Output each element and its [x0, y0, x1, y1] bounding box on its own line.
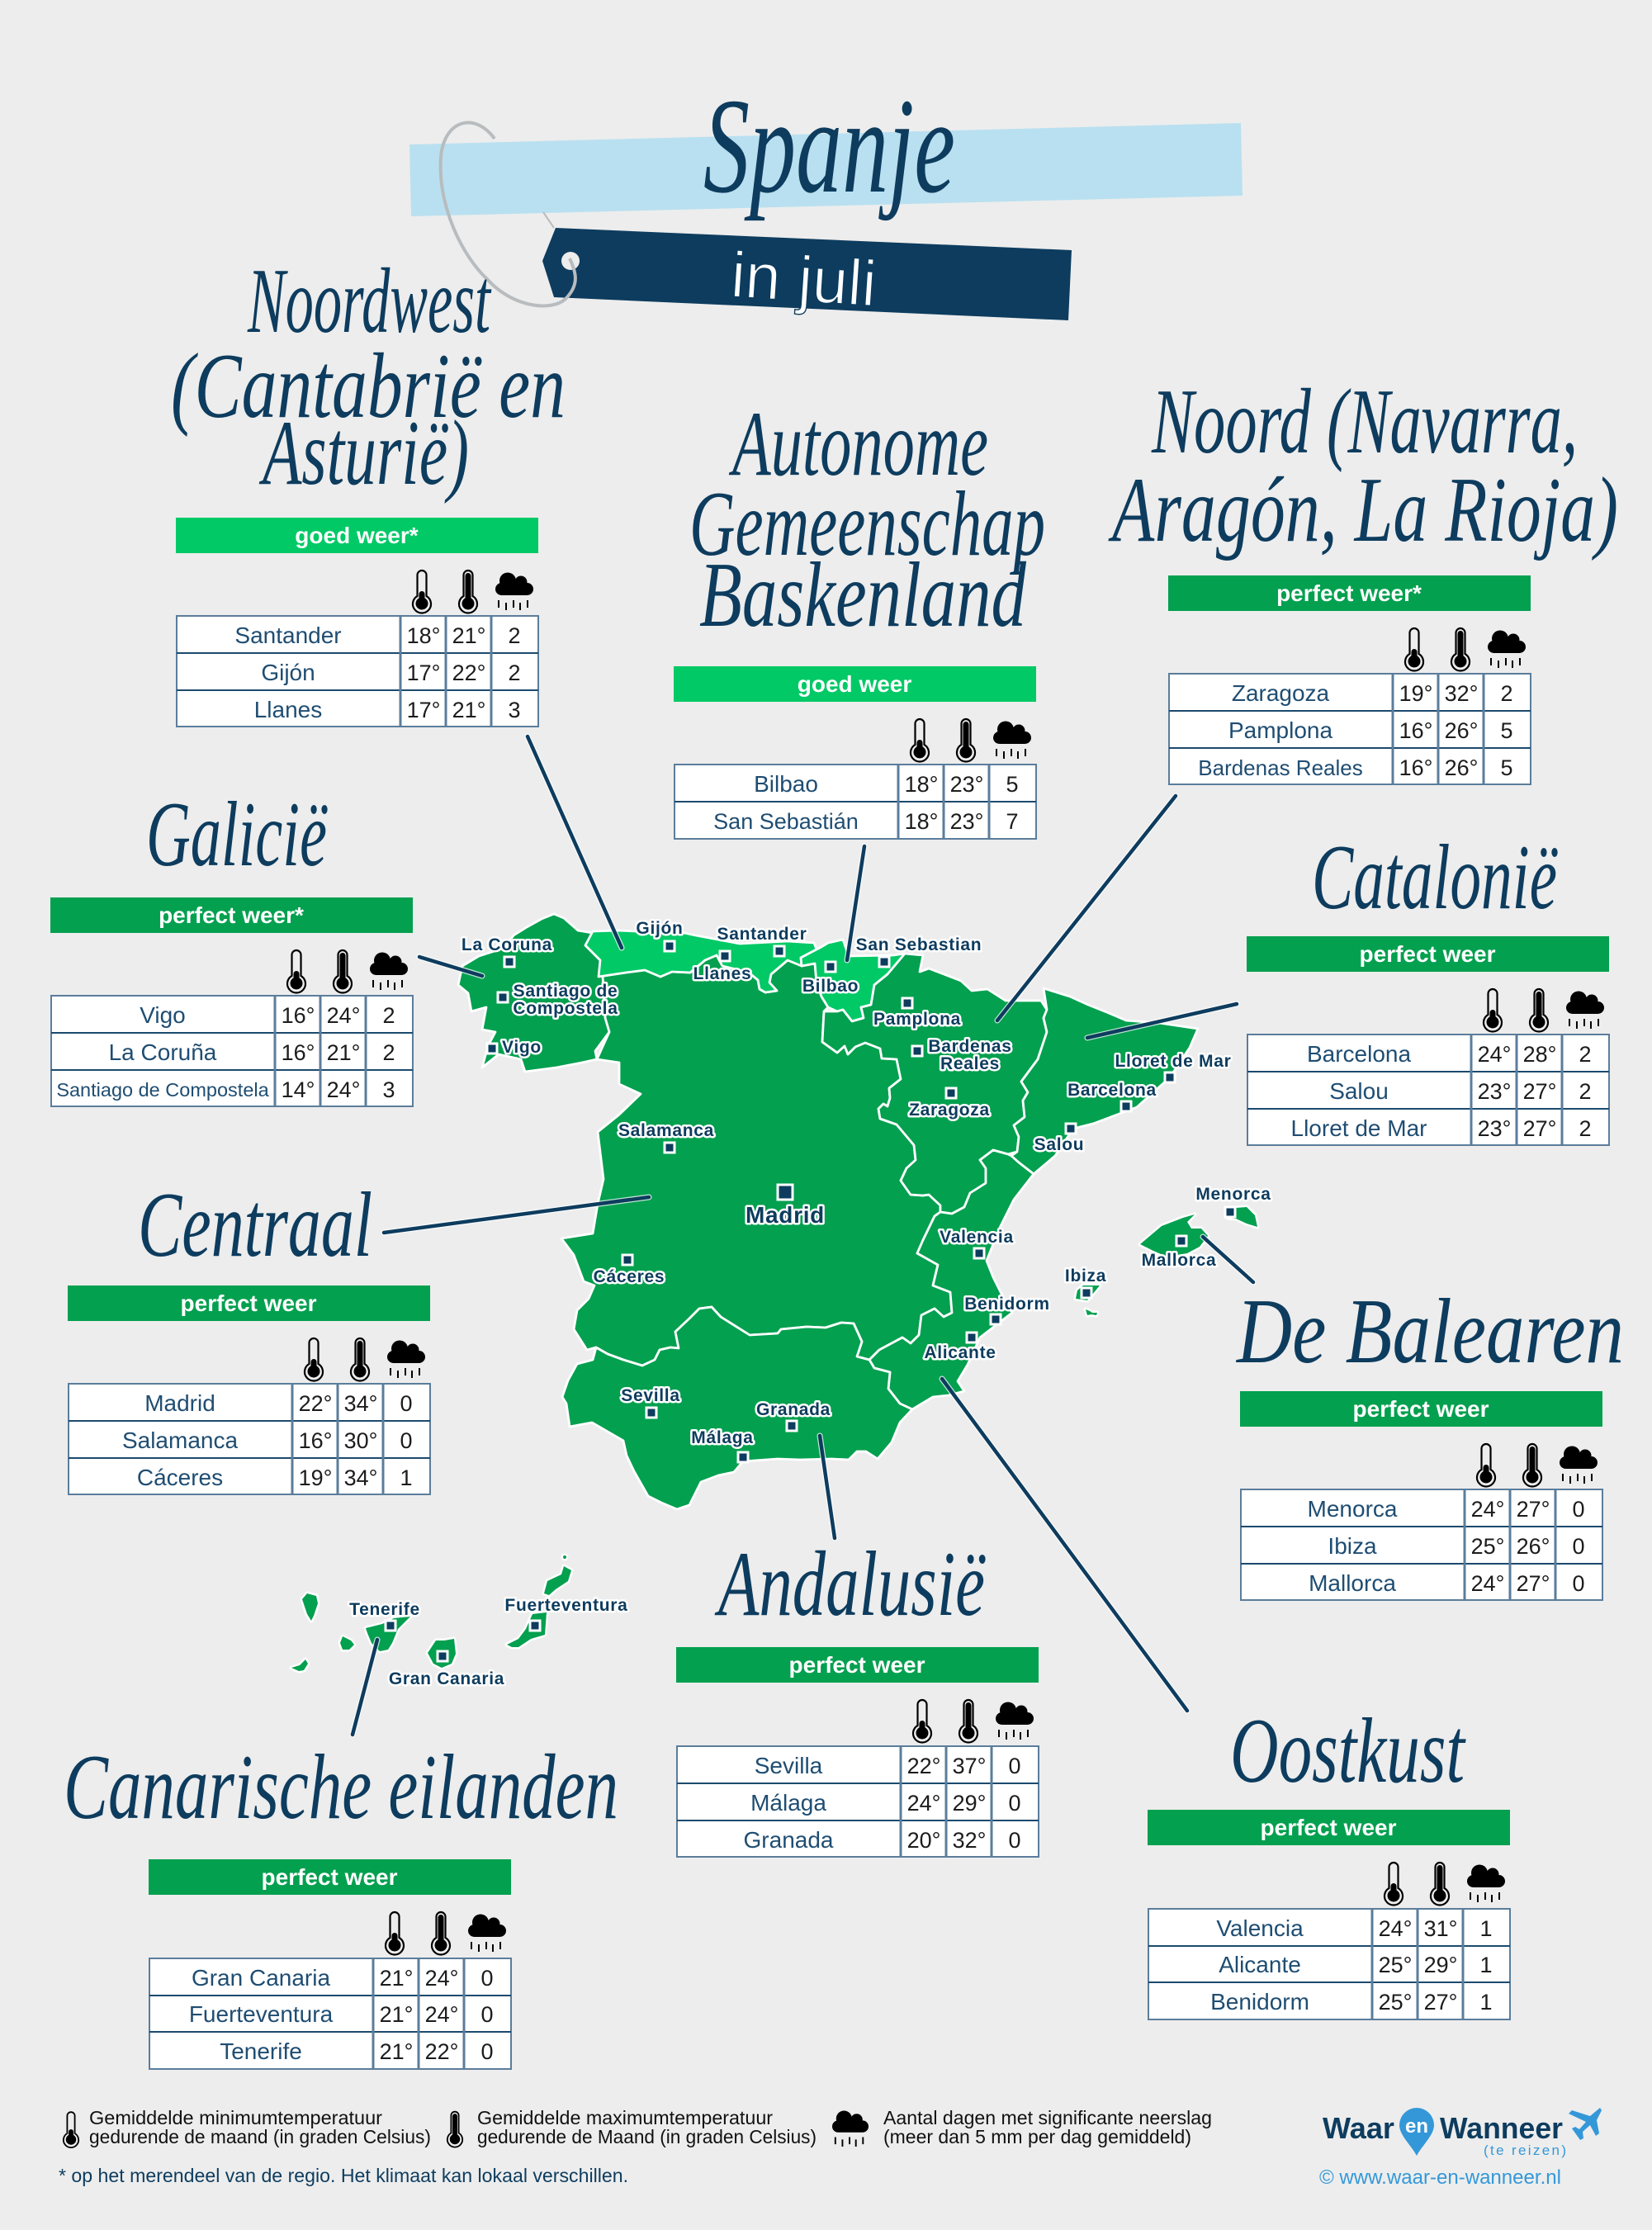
- panel: Baskenland: 23°: [950, 772, 983, 797]
- panel: Catalonië: perfect weer: [1360, 941, 1496, 967]
- logo: [1319, 2108, 1602, 2189]
- legend text: maximum temperature: Gemiddelde maximumtemperatuur: [477, 2107, 773, 2128]
- islands: Balearen: [1076, 1207, 1257, 1315]
- legend text: precipitation: Aantal dagen met significante neerslag: [883, 2107, 1212, 2128]
- panel: De Balearen: Ibiza: [1328, 1533, 1377, 1559]
- panel: Noordwest: goed weer*: [295, 523, 419, 548]
- heading: Oostkust: Oostkust: [1230, 1700, 1466, 1802]
- legend text: minimum temperature: [89, 2107, 431, 2147]
- panel: Oostkust: 25°: [1379, 1953, 1412, 1977]
- city labels: Lloret de Mar: [1115, 1052, 1231, 1071]
- panel: Catalonië: [1247, 936, 1609, 1145]
- title banner: [409, 123, 1243, 216]
- icon: precipitation: [832, 2110, 869, 2147]
- panel: Oostkust: Alicante: [1219, 1952, 1301, 1977]
- panel: De Balearen: 26°: [1517, 1534, 1550, 1559]
- panel: Canarische eilanden: 24°: [425, 1966, 458, 1991]
- title: Spanje: Spanje: [703, 70, 955, 221]
- panel: Andalusië: 22°: [907, 1754, 940, 1778]
- panel: Andalusië: perfect weer: [789, 1652, 925, 1678]
- panel: Galicië: 2: [382, 1040, 395, 1065]
- panel: Centraal: perfect weer: [181, 1290, 317, 1316]
- panel: Catalonië: 23°: [1478, 1116, 1511, 1141]
- city labels: Cáceres: [594, 1267, 665, 1286]
- panel: Galicië: 16°: [282, 1003, 315, 1028]
- legend text: precipitation: [883, 2107, 1212, 2147]
- city labels: Vigo: [502, 1038, 542, 1057]
- panel: Oostkust: 31°: [1424, 1916, 1457, 1941]
- panel: Catalonië: 27°: [1523, 1079, 1556, 1104]
- panel: Andalusië: 0: [1008, 1791, 1021, 1816]
- panel: Noordwest: 18°: [407, 623, 440, 648]
- panel: Noordwest: 2: [508, 660, 521, 685]
- panel: Oostkust: Valencia: [1216, 1915, 1304, 1941]
- panel: Baskenland: San Sebastián: [713, 809, 859, 834]
- legend text: minimum temperature: Gemiddelde minimumtemperatuur: [89, 2107, 382, 2128]
- heading: Noordwest: Asturië): [258, 402, 469, 504]
- panel: Noordwest: 21°: [452, 698, 485, 722]
- panel: Noord: 26°: [1445, 718, 1478, 743]
- city labels: [349, 919, 1271, 1688]
- region: Oostkust: [869, 1150, 1034, 1409]
- panel: Centraal: 34°: [344, 1465, 377, 1490]
- logo: © www.waar-en-wanneer.nl: [1319, 2166, 1561, 2189]
- panel: Galicië: 16°: [282, 1040, 315, 1065]
- footnote: * op het merendeel van de regio. Het klimaat kan lokaal verschillen.: [59, 2165, 628, 2186]
- panel: Centraal: Salamanca: [122, 1427, 238, 1453]
- panel: Noord: 16°: [1399, 755, 1432, 780]
- city labels: Santiago de: [514, 982, 618, 1001]
- legend text: maximum temperature: [477, 2107, 817, 2147]
- panel: Andalusië: 24°: [907, 1791, 940, 1816]
- map of Spain: [458, 914, 1198, 1509]
- city labels: Salou: [1034, 1135, 1084, 1154]
- legend text: precipitation: (meer dan 5 mm per dag gemiddeld): [883, 2126, 1191, 2147]
- panel: Oostkust: 27°: [1424, 1990, 1457, 2015]
- panel: Noordwest: 17°: [407, 698, 440, 722]
- panel: Noordwest: Llanes: [254, 697, 322, 722]
- panel: Centraal: [68, 1285, 430, 1494]
- panel: De Balearen: perfect weer: [1353, 1396, 1489, 1422]
- heading: Baskenland: Autonome: [728, 393, 988, 495]
- panel: Baskenland: 18°: [905, 772, 938, 797]
- panel: Galicië: 24°: [327, 1003, 360, 1028]
- panel: Canarische eilanden: 0: [480, 2039, 494, 2064]
- city labels: Bilbao: [802, 977, 859, 996]
- panel: Noord: 32°: [1445, 681, 1478, 706]
- panel: Oostkust: 1: [1479, 1953, 1493, 1977]
- panel: Galicië: Vigo: [140, 1002, 186, 1028]
- panel: Andalusië: 37°: [953, 1754, 986, 1778]
- city labels: Sevilla: [621, 1386, 680, 1405]
- panel: Catalonië: 2: [1579, 1079, 1592, 1104]
- panel: Baskenland: goed weer: [798, 671, 911, 697]
- panel: Baskenland: 5: [1006, 772, 1019, 797]
- panel: Canarische eilanden: 24°: [425, 2002, 458, 2027]
- panel: De Balearen: 24°: [1471, 1497, 1504, 1522]
- panel: Oostkust: 29°: [1424, 1953, 1457, 1977]
- city labels: Madrid: [746, 1202, 825, 1228]
- panel: Noord: perfect weer*: [1276, 580, 1422, 606]
- panel: De Balearen: 0: [1572, 1497, 1585, 1522]
- city labels: Alicante: [924, 1343, 996, 1362]
- heading: Noordwest: Noordwest: [247, 250, 492, 353]
- city labels: Tenerife: [349, 1600, 420, 1619]
- panel: Baskenland: [674, 666, 1036, 839]
- city labels: Mallorca: [1142, 1251, 1216, 1270]
- panel: Canarische eilanden: Gran Canaria: [192, 1965, 330, 1991]
- panel: Canarische eilanden: 0: [480, 2002, 494, 2027]
- subtitle tag: in juli: [441, 123, 1072, 320]
- logo: Wanneer: [1440, 2111, 1563, 2145]
- panel: De Balearen: 0: [1572, 1571, 1585, 1596]
- city labels: Compostela: [513, 999, 618, 1018]
- panel: Catalonië: 23°: [1478, 1079, 1511, 1104]
- panel: Centraal: 34°: [344, 1391, 377, 1416]
- panel: Andalusië: 0: [1008, 1828, 1021, 1853]
- panel: De Balearen: 25°: [1471, 1534, 1504, 1559]
- panel: Noord: 16°: [1399, 718, 1432, 743]
- connector lines: [353, 736, 1253, 1735]
- panel: Noordwest: 22°: [452, 660, 485, 685]
- panel: Canarische eilanden: 21°: [380, 1966, 413, 1991]
- panel: Baskenland: Bilbao: [754, 771, 818, 797]
- city labels: Bardenas: [928, 1037, 1012, 1056]
- panel: Galicië: perfect weer*: [159, 902, 304, 928]
- panel: Catalonië: 24°: [1478, 1042, 1511, 1067]
- legend text: minimum temperature: gedurende de maand (in graden Celsius): [89, 2126, 431, 2147]
- panel: Noord: 2: [1500, 681, 1513, 706]
- islands: Canarische eilanden: [291, 1555, 571, 1671]
- panel: Baskenland: 7: [1006, 809, 1019, 834]
- region: Noordwest: [585, 930, 817, 992]
- city labels: Menorca: [1195, 1185, 1271, 1204]
- panel: Canarische eilanden: [149, 1859, 511, 2069]
- panel: De Balearen: [1240, 1391, 1602, 1600]
- panel: Noordwest: Gijón: [261, 660, 315, 685]
- panel: Oostkust: [1148, 1810, 1510, 2019]
- region: Galicië: [458, 914, 609, 1072]
- panel: De Balearen: 27°: [1517, 1497, 1550, 1522]
- city labels: Barcelona: [1067, 1081, 1157, 1100]
- panel: Catalonië: 27°: [1523, 1116, 1556, 1141]
- panel: Oostkust: 1: [1479, 1990, 1493, 2015]
- city labels: Valencia: [940, 1228, 1014, 1247]
- panel: Andalusië: Málaga: [750, 1790, 826, 1816]
- panel: Noordwest: Santander: [234, 623, 342, 648]
- city labels: Gijón: [636, 919, 684, 938]
- icon: minimum temperature: [64, 2112, 78, 2147]
- panel: Galicië: La Coruña: [109, 1039, 217, 1065]
- legend text: maximum temperature: gedurende de Maand (in graden Celsius): [477, 2126, 817, 2147]
- panel: Noordwest: 17°: [407, 660, 440, 685]
- city labels: Reales: [940, 1054, 1000, 1073]
- panel: Oostkust: Benidorm: [1210, 1989, 1309, 2015]
- city labels: Zaragoza: [909, 1101, 990, 1120]
- panel: Oostkust: perfect weer: [1261, 1815, 1397, 1840]
- panel: Catalonië: 2: [1579, 1116, 1592, 1141]
- logo: en: [1405, 2115, 1428, 2138]
- heading: Baskenland: Gemeenschap: [689, 473, 1045, 575]
- panel: Noord: Pamplona: [1228, 717, 1332, 743]
- panel: Noordwest: 3: [508, 698, 521, 722]
- city labels: Málaga: [691, 1428, 754, 1447]
- icon: maximum temperature: [447, 2112, 462, 2147]
- panel: De Balearen: 0: [1572, 1534, 1585, 1559]
- heading: Canarische eilanden: Canarische eilanden: [64, 1736, 618, 1839]
- city labels: Fuerteventura: [504, 1596, 628, 1615]
- panel: Noord: Bardenas Reales: [1198, 755, 1363, 780]
- region: Catalonië: [1011, 988, 1198, 1174]
- region: Centraal: [561, 955, 952, 1366]
- panel: Canarische eilanden: Tenerife: [220, 2038, 302, 2064]
- panel: Canarische eilanden: Fuerteventura: [189, 2001, 334, 2027]
- city labels: Gran Canaria: [389, 1669, 504, 1688]
- panel: Centraal: 19°: [299, 1465, 332, 1490]
- panel: Centraal: 22°: [299, 1391, 332, 1416]
- panel: Oostkust: 24°: [1379, 1916, 1412, 1941]
- heading: Centraal: Centraal: [138, 1174, 372, 1276]
- city labels: La Coruna: [462, 935, 552, 954]
- panel: Baskenland: 18°: [905, 809, 938, 834]
- panel: Noord: 19°: [1399, 681, 1432, 706]
- panel: Noord: [1168, 575, 1531, 784]
- heading: Galicië: Galicië: [146, 784, 328, 886]
- heading: Noordwest: [171, 250, 566, 504]
- panel: Noord: 26°: [1445, 755, 1478, 780]
- panel: Centraal: 0: [400, 1391, 413, 1416]
- city labels: Salamanca: [618, 1121, 714, 1140]
- panel: Andalusië: 0: [1008, 1754, 1021, 1778]
- heading: Baskenland: [689, 393, 1045, 646]
- panel: Canarische eilanden: 21°: [380, 2039, 413, 2064]
- panel: Centraal: Madrid: [144, 1390, 215, 1416]
- city labels: San Sebastian: [856, 935, 982, 954]
- panel: Centraal: 0: [400, 1428, 413, 1453]
- panel: Centraal: 1: [400, 1465, 413, 1490]
- city markers: [386, 941, 1235, 1661]
- panel: Noordwest: [176, 518, 538, 727]
- panel: Galicië: 14°: [282, 1077, 315, 1102]
- panel: Oostkust: 1: [1479, 1916, 1493, 1941]
- panel: De Balearen: Menorca: [1308, 1496, 1398, 1522]
- panel: Canarische eilanden: 0: [480, 1966, 494, 1991]
- panel: Catalonië: 2: [1579, 1042, 1592, 1067]
- panel: Andalusië: Sevilla: [755, 1753, 823, 1778]
- panel: Catalonië: Barcelona: [1307, 1041, 1411, 1067]
- panel: Centraal: 30°: [344, 1428, 377, 1453]
- panel: Andalusië: 32°: [953, 1828, 986, 1853]
- panel: Oostkust: 25°: [1379, 1990, 1412, 2015]
- legend: [64, 2107, 1212, 2147]
- panel: Noordwest: 2: [508, 623, 521, 648]
- city labels: Santander: [717, 925, 807, 944]
- panel: Galicië: 2: [382, 1003, 395, 1028]
- panel: Galicië: Santiago de Compostela: [56, 1079, 270, 1101]
- panel: Andalusië: 20°: [907, 1828, 940, 1853]
- panel: Centraal: 16°: [299, 1428, 332, 1453]
- panel: Canarische eilanden: 22°: [425, 2039, 458, 2064]
- panel: Galicië: [50, 897, 413, 1106]
- heading: Baskenland: Baskenland: [699, 544, 1027, 646]
- heading: Andalusië: Andalusië: [714, 1533, 986, 1636]
- city labels: Llanes: [693, 964, 751, 983]
- city labels: Granada: [756, 1400, 831, 1419]
- subtitle tag: in juli: in juli: [729, 238, 878, 320]
- panel: Noord: 5: [1500, 755, 1513, 780]
- panel: Galicië: 3: [382, 1077, 395, 1102]
- panel: Catalonië: 28°: [1523, 1042, 1556, 1067]
- panel: Canarische eilanden: perfect weer: [262, 1864, 398, 1890]
- panel: De Balearen: Mallorca: [1309, 1570, 1396, 1596]
- panel: De Balearen: 27°: [1517, 1571, 1550, 1596]
- city labels: Pamplona: [873, 1010, 961, 1029]
- heading: Noordwest: (Cantabrië en: [171, 335, 566, 438]
- logo: (te reizen): [1484, 2142, 1566, 2158]
- panel: Andalusië: Granada: [744, 1827, 834, 1853]
- panel: Galicië: 24°: [327, 1077, 360, 1102]
- heading: Noord: [1108, 371, 1618, 561]
- logo: Waar: [1323, 2111, 1394, 2145]
- panel: Andalusië: 29°: [953, 1791, 986, 1816]
- panel: Centraal: Cáceres: [137, 1465, 223, 1490]
- panel: Catalonië: Lloret de Mar: [1291, 1115, 1427, 1141]
- panel: Catalonië: Salou: [1329, 1078, 1389, 1104]
- panel: Baskenland: 23°: [950, 809, 983, 834]
- region: Baskenland: [801, 940, 905, 1021]
- panel: Galicië: 21°: [327, 1040, 360, 1065]
- panel: Noordwest: 21°: [452, 623, 485, 648]
- panel: Noord: 5: [1500, 718, 1513, 743]
- city labels: Benidorm: [964, 1295, 1050, 1314]
- panel: Andalusië: [676, 1647, 1039, 1857]
- region: Noord: [822, 954, 1047, 1214]
- panel: De Balearen: 24°: [1471, 1571, 1504, 1596]
- city labels: Ibiza: [1065, 1267, 1106, 1285]
- region: Andalusië: [562, 1307, 912, 1509]
- panel: Canarische eilanden: 21°: [380, 2002, 413, 2027]
- panel: Noord: Zaragoza: [1232, 680, 1330, 706]
